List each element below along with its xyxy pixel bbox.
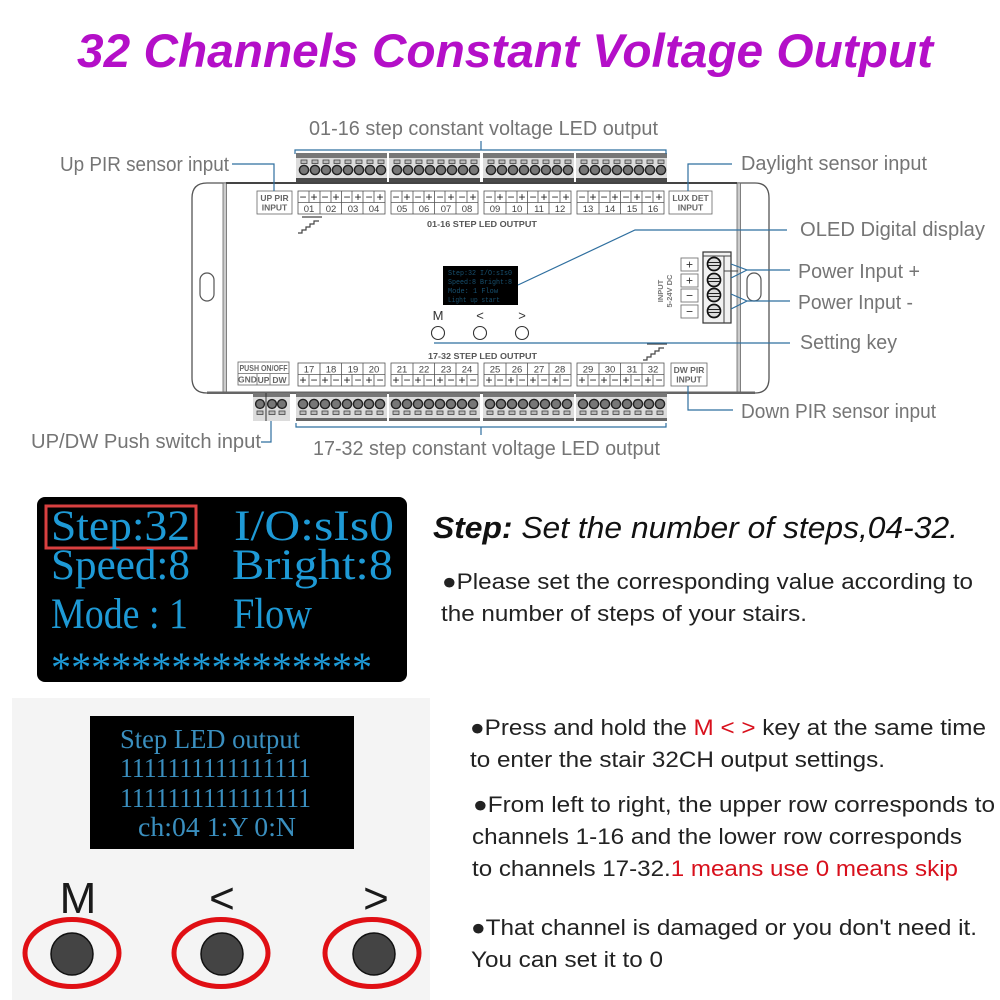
highlight box: Step xyxy=(46,506,196,548)
panel: channel output screen photo xyxy=(12,698,430,1000)
top channel labels: 05 xyxy=(397,204,407,215)
bottom channel labels: 17 xyxy=(304,364,314,376)
power input terminal: 5-24V DC xyxy=(665,274,674,307)
text block: skip damaged channel xyxy=(471,915,977,972)
input boxes: DW PIR xyxy=(674,365,704,375)
bottom channel labels: 18 xyxy=(326,364,336,376)
bottom channel labels xyxy=(298,363,664,387)
setting keys: > xyxy=(518,308,526,323)
text block: step note: ●Please set the corresponding value according to xyxy=(442,569,973,594)
text block: enter settings: ●Press and hold the M < > key at the same time xyxy=(470,715,986,740)
text block: skip damaged channel: You can set it to 0 xyxy=(471,947,663,972)
bottom channel labels: 26 xyxy=(512,364,522,376)
screen text: Step:32 xyxy=(51,503,190,550)
bottom channel labels: 21 xyxy=(397,364,407,376)
input boxes: LUX DET xyxy=(672,193,709,203)
small OLED display: Mode: 1 Flow xyxy=(448,288,499,296)
screen text: Mode : 1 xyxy=(51,591,188,638)
top channel labels: 02 xyxy=(326,204,336,215)
top channel labels: 08 xyxy=(462,204,472,215)
input boxes: PUSH ON/OFF xyxy=(240,363,288,373)
top channel labels: 01 xyxy=(304,204,314,215)
input boxes: INPUT xyxy=(676,374,703,384)
setting keys xyxy=(432,308,528,340)
callout labels: UP/DW Push switch input xyxy=(31,431,261,453)
screen text: Bright:8 xyxy=(232,542,393,589)
text block: enter settings: to enter the stair 32CH output settings. xyxy=(470,747,885,772)
bottom terminal blocks xyxy=(253,393,667,421)
input boxes: INPUT xyxy=(262,202,288,212)
text block: step note xyxy=(441,569,973,626)
bottom channel labels: 25 xyxy=(490,364,500,376)
small OLED display xyxy=(443,266,518,305)
power input terminal: INPUT xyxy=(656,279,665,302)
top terminal blocks xyxy=(296,153,667,182)
key labels: < xyxy=(209,874,235,923)
input boxes: INPUT xyxy=(678,202,704,212)
callout labels: Power Input + xyxy=(798,261,920,283)
power input terminal: + xyxy=(686,274,693,288)
OLED output screen: Step LED output xyxy=(120,724,300,754)
small OLED display: Light up start xyxy=(448,297,500,305)
panel: OLED main screen xyxy=(37,497,407,692)
text block: channel mapping: channels 1-16 and the lower row corresponds xyxy=(472,824,962,849)
stair icons and section captions: 17-32 STEP LED OUTPUT xyxy=(428,351,538,361)
key labels: > xyxy=(363,874,389,923)
top channel labels: −+−+−+−+−+−+−+−+−+−+−+−+−+−+−+−+ xyxy=(299,190,663,204)
title: 32 Channels Constant Voltage Output xyxy=(77,24,935,77)
callout labels: Daylight sensor input xyxy=(741,153,927,175)
input boxes xyxy=(238,191,712,386)
device body xyxy=(192,182,769,394)
callout labels: Power Input - xyxy=(798,292,913,314)
callout labels xyxy=(31,118,985,460)
top channel labels: 16 xyxy=(648,204,658,215)
bottom channel labels: 31 xyxy=(627,364,637,376)
button right xyxy=(325,920,419,986)
bottom channel labels: 20 xyxy=(369,364,379,376)
text block: enter settings xyxy=(470,715,986,772)
bottom channel labels: 32 xyxy=(648,364,658,376)
callout labels: Down PIR sensor input xyxy=(741,401,936,423)
callout labels: 01-16 step constant voltage LED output xyxy=(309,118,658,140)
top channel labels: 13 xyxy=(583,204,593,215)
stair icons and section captions: 01-16 STEP LED OUTPUT xyxy=(427,219,538,229)
power input terminal: − xyxy=(686,304,693,318)
callout labels: Up PIR sensor input xyxy=(60,154,229,176)
screen text: Speed:8 xyxy=(51,542,190,589)
power input terminal: − xyxy=(686,288,693,302)
small OLED display: Step:32 I/O:sIs0 xyxy=(448,270,512,278)
text block: channel mapping: ●From left to right, the upper row corresponds to xyxy=(473,792,995,817)
OLED output screen: 1111111111111111 xyxy=(120,753,311,783)
OLED output screen: 1111111111111111 xyxy=(120,783,311,813)
text block: channel mapping xyxy=(472,792,995,881)
stair icons and section captions xyxy=(298,217,667,361)
power input terminal: + xyxy=(686,258,693,272)
OLED output screen xyxy=(90,716,354,849)
text block: skip damaged channel: ●That channel is damaged or you don't need it. xyxy=(471,915,977,940)
key labels xyxy=(60,874,389,923)
callout labels: OLED Digital display xyxy=(800,219,985,241)
input boxes: DW xyxy=(272,375,288,385)
panel: controller wiring diagram xyxy=(31,118,985,460)
top channel labels: 09 xyxy=(490,204,500,215)
bottom channel labels: 19 xyxy=(348,364,358,376)
screen text: I/O:sIs0 xyxy=(234,503,394,550)
key labels: M xyxy=(60,874,96,923)
top channel labels: 11 xyxy=(534,204,544,215)
top channel labels xyxy=(298,190,664,215)
top channel labels: 12 xyxy=(555,204,565,215)
bottom channel labels: 28 xyxy=(555,364,565,376)
setting keys: M xyxy=(433,308,443,323)
top channel labels: 03 xyxy=(348,204,358,215)
button left xyxy=(174,920,268,986)
top channel labels: 14 xyxy=(605,204,615,215)
input boxes: GND xyxy=(238,374,257,384)
callout labels: Setting key xyxy=(800,332,897,354)
top channel labels: 15 xyxy=(627,204,637,215)
top channel labels: 04 xyxy=(369,204,379,215)
text block: step note: the number of steps of your stairs. xyxy=(441,601,807,626)
text block: channel mapping: to channels 17-32. 1 means use 0 means skip xyxy=(472,856,958,881)
small OLED display: Speed:8 Bright:8 xyxy=(448,279,512,287)
bottom channel labels: 23 xyxy=(441,364,451,376)
top channel labels: 10 xyxy=(512,204,522,215)
heading: step setting: Step: Set the number of steps,04-32. xyxy=(433,511,958,545)
bottom channel labels: 22 xyxy=(419,364,429,376)
OLED output screen: ch:04 1:Y 0:N xyxy=(138,812,296,842)
callout labels: 17-32 step constant voltage LED output xyxy=(313,438,660,460)
leader lines xyxy=(232,141,790,442)
screen text: **************** xyxy=(51,645,372,692)
input boxes: UP PIR xyxy=(260,193,289,203)
bottom channel labels: 24 xyxy=(462,364,472,376)
bottom channel labels: 29 xyxy=(583,364,593,376)
screen text xyxy=(51,503,394,692)
bottom channel labels: 30 xyxy=(605,364,615,376)
button M xyxy=(25,920,119,986)
top channel labels: 07 xyxy=(441,204,451,215)
bottom channel labels: 27 xyxy=(534,364,544,376)
bottom channel labels: +−+−+−+−+−+−+−+−+−+−+−+−+−+−+−+− xyxy=(299,373,663,387)
top channel labels: 06 xyxy=(419,204,429,215)
screen text: Flow xyxy=(233,591,312,638)
setting keys: < xyxy=(476,308,484,323)
input boxes: UP xyxy=(258,375,270,385)
power input terminal xyxy=(656,252,738,323)
